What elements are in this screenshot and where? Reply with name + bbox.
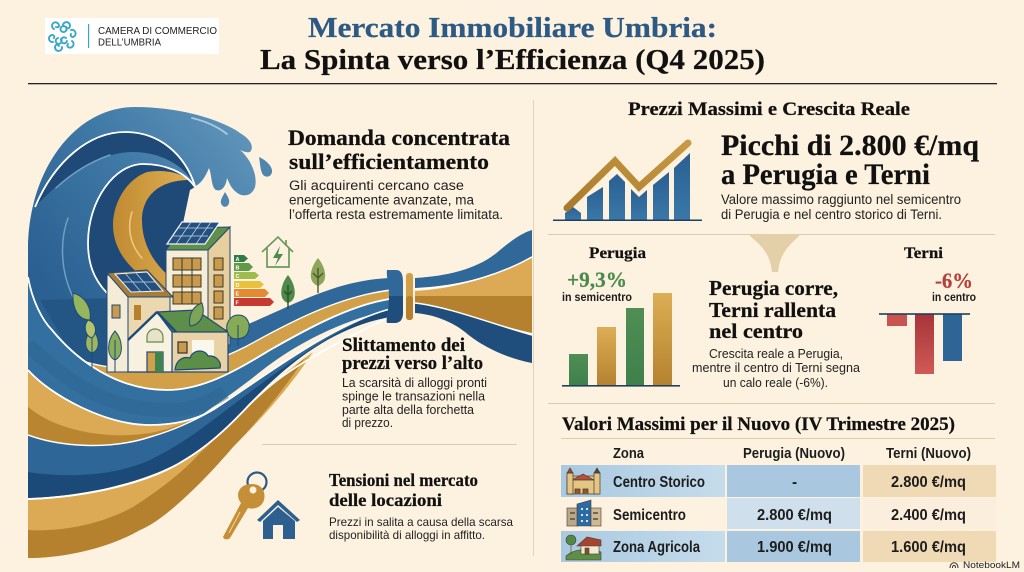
text block: Domanda concentrata: sull’efficientamento — [289, 149, 489, 174]
icon: farmhouse — [566, 535, 601, 560]
text block: Perugia corre: nel centro — [709, 319, 803, 343]
text block: Domanda concentrata — [288, 125, 510, 222]
text block: Picchi: Valore massimo raggiunto nel semicentro — [721, 192, 961, 207]
text block: Tensioni nel mercato: Tensioni nel mercato — [329, 470, 478, 490]
watermark: NotebookLM: NotebookLM — [963, 560, 1020, 571]
right stream — [415, 230, 532, 288]
energy label: B — [236, 266, 240, 272]
table: Valori Massimi: Semicentro — [613, 507, 686, 524]
icon: historic centre — [567, 468, 600, 494]
text block: Slittamento dei prezzi: La scarsità di alloggi pronti — [342, 375, 487, 390]
chart: Terni: in centro — [932, 292, 976, 304]
text block: Slittamento dei prezzi — [342, 336, 487, 430]
table: Valori Massimi: Zona — [613, 445, 645, 462]
title: La Spinta verso l’Efficienza (Q4 2025) — [260, 44, 765, 76]
text block: Slittamento dei prezzi: di prezzo. — [342, 415, 393, 430]
stream top blue — [228, 278, 389, 354]
text block: Perugia corre: Perugia corre, — [709, 276, 838, 300]
energy label: F — [236, 300, 240, 306]
blue band — [28, 283, 389, 424]
energy label — [234, 255, 274, 306]
text block: Domanda concentrata: Gli acquirenti cercano case — [289, 178, 464, 193]
logo: Camera di Commercio: DELL’UMBRIA — [98, 36, 161, 48]
chart: rising prices — [553, 143, 702, 221]
text block: Slittamento dei prezzi: prezzi verso l’alto — [342, 354, 483, 374]
text block: Slittamento dei prezzi: Slittamento dei — [342, 336, 465, 356]
gold band — [28, 372, 192, 436]
trees and leaves — [73, 293, 249, 372]
water drops — [221, 157, 272, 207]
tall building — [166, 222, 230, 345]
table: Valori Massimi: 1.900 €/mq — [757, 539, 832, 556]
title: Mercato Immobiliare Umbria: — [308, 12, 717, 44]
logo: Camera di Commercio — [45, 18, 219, 54]
table: Valori Massimi: Centro Storico — [613, 474, 705, 491]
front house — [128, 310, 228, 372]
title — [260, 12, 765, 76]
table: Valori Massimi: Valori Massimi per il Nuovo (IV Trimestre 2025) — [562, 414, 955, 435]
table: Valori Massimi: - — [792, 474, 797, 491]
chart: Perugia: +9,3% — [567, 267, 627, 292]
chart: Terni: -6% — [935, 268, 973, 293]
chart: Perugia — [562, 245, 680, 387]
chart: Terni: Terni — [904, 245, 944, 262]
inner navy curl — [89, 164, 195, 291]
navy crescent — [35, 132, 195, 207]
lower blue band — [28, 309, 390, 498]
pipe connector — [387, 270, 403, 323]
text block: Tensioni nel mercato: disponibilità di alloggi in affitto. — [329, 528, 485, 542]
table: Valori Massimi: Terni (Nuovo) — [886, 445, 971, 462]
table: Valori Massimi: 2.400 €/mq — [891, 507, 966, 524]
text block: Perugia corre: Terni rallenta — [709, 298, 837, 322]
text block: Perugia corre — [692, 276, 861, 390]
stream gold cup — [73, 291, 390, 390]
heading: Prezzi Massimi: Prezzi Massimi e Crescita Reale — [628, 99, 910, 120]
text block: Slittamento dei prezzi: spinge le transazioni nella — [342, 388, 486, 404]
chart: Terni — [879, 245, 976, 374]
left house — [107, 270, 173, 372]
text block: Picchi — [721, 129, 979, 222]
logo: Camera di Commercio: CAMERA DI COMMERCIO — [98, 25, 217, 37]
table: Valori Massimi: Zona Agricola — [613, 539, 700, 556]
text block: Slittamento dei prezzi: parte alta della forchetta — [342, 402, 475, 417]
energy label: A — [236, 257, 240, 263]
table: Valori Massimi: 2.800 €/mq — [891, 474, 966, 491]
table: Valori Massimi: 2.800 €/mq — [757, 507, 832, 524]
energy label: D — [236, 283, 240, 289]
chart: Perugia: Perugia — [589, 245, 646, 262]
icon: key and house — [223, 472, 300, 539]
inner blue behind houses — [40, 298, 106, 366]
icon: semicentre buildings — [567, 500, 601, 526]
text block: Perugia corre: Crescita reale a Perugia, — [709, 346, 843, 361]
text block: Picchi: di Perugia e nel centro storico di Terni. — [721, 207, 942, 222]
text block: Picchi: Picchi di 2.800 €/mq — [721, 129, 979, 162]
bottom gold band — [28, 352, 313, 558]
text block: Picchi: a Perugia e Terni — [721, 158, 930, 191]
text block: Domanda concentrata: energeticamente avanzate, ma — [289, 192, 474, 208]
table: Valori Massimi — [561, 414, 996, 562]
energy label: C — [236, 274, 240, 280]
text block: Domanda concentrata: l’offerta resta estremamente limitata. — [289, 207, 503, 222]
text block: Perugia corre: mentre il centro di Terni segna — [692, 360, 861, 375]
funnel arrow — [748, 234, 801, 272]
eco house icon — [262, 237, 293, 267]
text block: Tensioni nel mercato — [329, 470, 513, 542]
energy label: E — [236, 292, 240, 298]
text block: Tensioni nel mercato: Prezzi in salita a causa della scarsa — [329, 515, 513, 529]
table: Valori Massimi: 1.600 €/mq — [891, 539, 966, 556]
trees right — [281, 258, 325, 309]
table: Valori Massimi: Perugia (Nuovo) — [743, 445, 845, 462]
text block: Tensioni nel mercato: delle locazioni — [329, 490, 442, 510]
wave crest — [28, 107, 256, 344]
gold curl — [113, 171, 190, 292]
text block: Domanda concentrata: Domanda concentrata — [288, 125, 510, 150]
text block: Perugia corre: un calo reale (-6%). — [723, 375, 828, 390]
illustration: wave with houses — [28, 107, 532, 558]
chart: Perugia: in semicentro — [562, 292, 632, 304]
